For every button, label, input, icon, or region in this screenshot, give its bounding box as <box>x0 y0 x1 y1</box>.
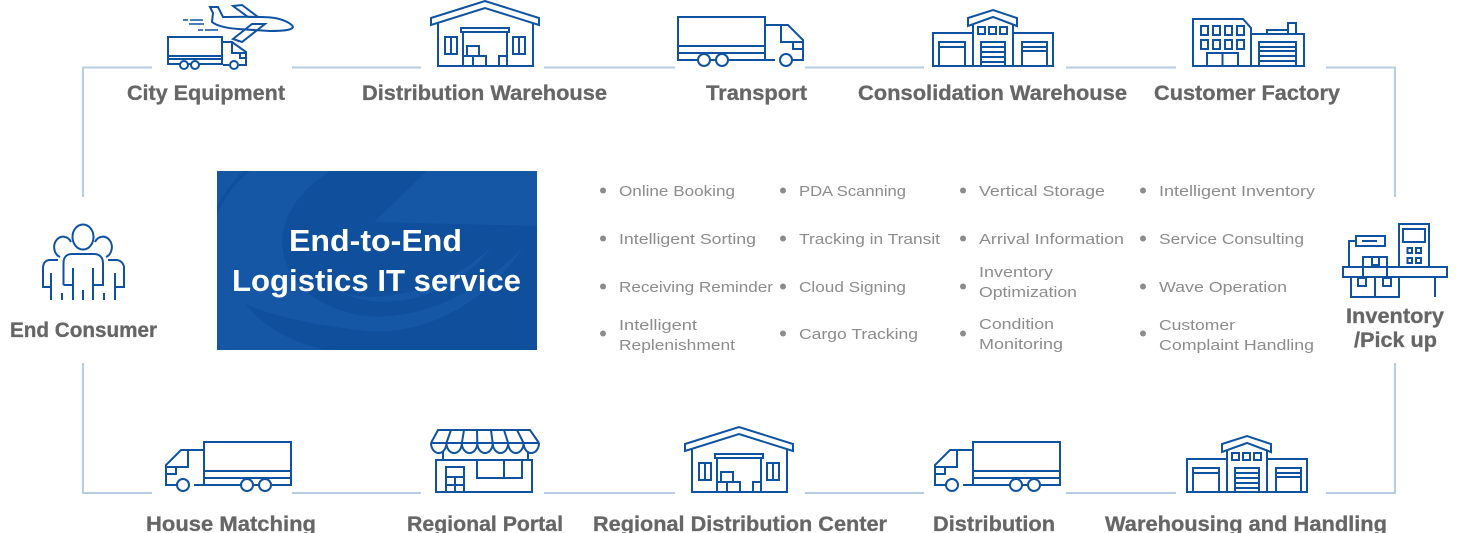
node: Transport <box>678 17 807 105</box>
node: Inventory / Pick up <box>1343 224 1447 352</box>
node: Regional Distribution Center <box>593 427 887 533</box>
icon: truck <box>166 442 291 491</box>
heading: End-to-End <box>289 223 462 258</box>
label: City Equipment <box>127 82 285 105</box>
icon: warehouse <box>685 427 793 492</box>
column 3: Condition <box>979 316 1054 333</box>
label: Distribution Warehouse <box>362 82 607 105</box>
column 4: Service Consulting <box>1159 231 1304 248</box>
label: End Consumer <box>10 319 157 342</box>
column 2 <box>780 183 941 343</box>
heading line two: Logistics IT service <box>232 263 521 298</box>
column 4: Wave Operation <box>1159 279 1287 296</box>
column 3: Vertical Storage <box>979 183 1105 200</box>
icon: truck <box>678 17 803 66</box>
column 4: Complaint Handling <box>1159 337 1314 354</box>
column 1: Receiving Reminder <box>619 279 773 296</box>
icon: warehouse <box>431 1 539 66</box>
column 2: Cloud Signing <box>799 279 906 296</box>
label line one: Inventory <box>1346 305 1444 328</box>
column 3: Inventory <box>979 264 1054 281</box>
panel background <box>217 171 537 350</box>
column 3: Arrival Information <box>979 231 1124 248</box>
icon: consolidation warehouse <box>933 10 1053 66</box>
connector frame <box>83 68 1395 493</box>
icon: storefront <box>431 430 539 492</box>
label: Customer Factory <box>1154 82 1340 105</box>
column 2: Cargo Tracking <box>799 326 918 343</box>
column 2: Tracking in Transit <box>799 231 941 248</box>
node: Consolidation Warehouse <box>858 10 1127 105</box>
column 1 <box>600 183 773 354</box>
column 1: Online Booking <box>619 183 735 200</box>
icon: truck <box>935 442 1060 491</box>
icon: packing station <box>1343 224 1447 297</box>
service list <box>600 183 1316 354</box>
label: Transport <box>706 82 807 105</box>
column 4 <box>1140 183 1316 354</box>
icon: warehouse building <box>1187 436 1307 492</box>
label: Consolidation Warehouse <box>858 82 1127 105</box>
node: Warehousing and Handling <box>1105 436 1387 533</box>
column 3 <box>960 183 1124 353</box>
column 3: Monitoring <box>979 336 1063 353</box>
label line two: /Pick up <box>1354 329 1437 352</box>
icon: people group <box>43 224 124 300</box>
column 3: Optimization <box>979 284 1077 301</box>
node: Distribution <box>933 442 1060 533</box>
node: Customer Factory <box>1154 19 1340 105</box>
column 4: Customer <box>1159 317 1235 334</box>
column 2: PDA Scanning <box>799 183 906 200</box>
icon: factory <box>1193 19 1304 66</box>
column 1: Replenishment <box>619 337 736 354</box>
node: Regional Portal <box>407 430 563 533</box>
column 1: Intelligent <box>619 317 698 334</box>
node: End Consumer <box>10 224 157 342</box>
panel: End-to-End Logistics IT service <box>217 171 537 350</box>
node: City Equipment <box>127 5 293 105</box>
node: Distribution Warehouse <box>362 1 607 105</box>
column 1: Intelligent Sorting <box>619 231 756 248</box>
node: House Matching <box>146 442 316 533</box>
column 4: Intelligent Inventory <box>1159 183 1316 200</box>
icon: plane and truck <box>168 5 293 69</box>
